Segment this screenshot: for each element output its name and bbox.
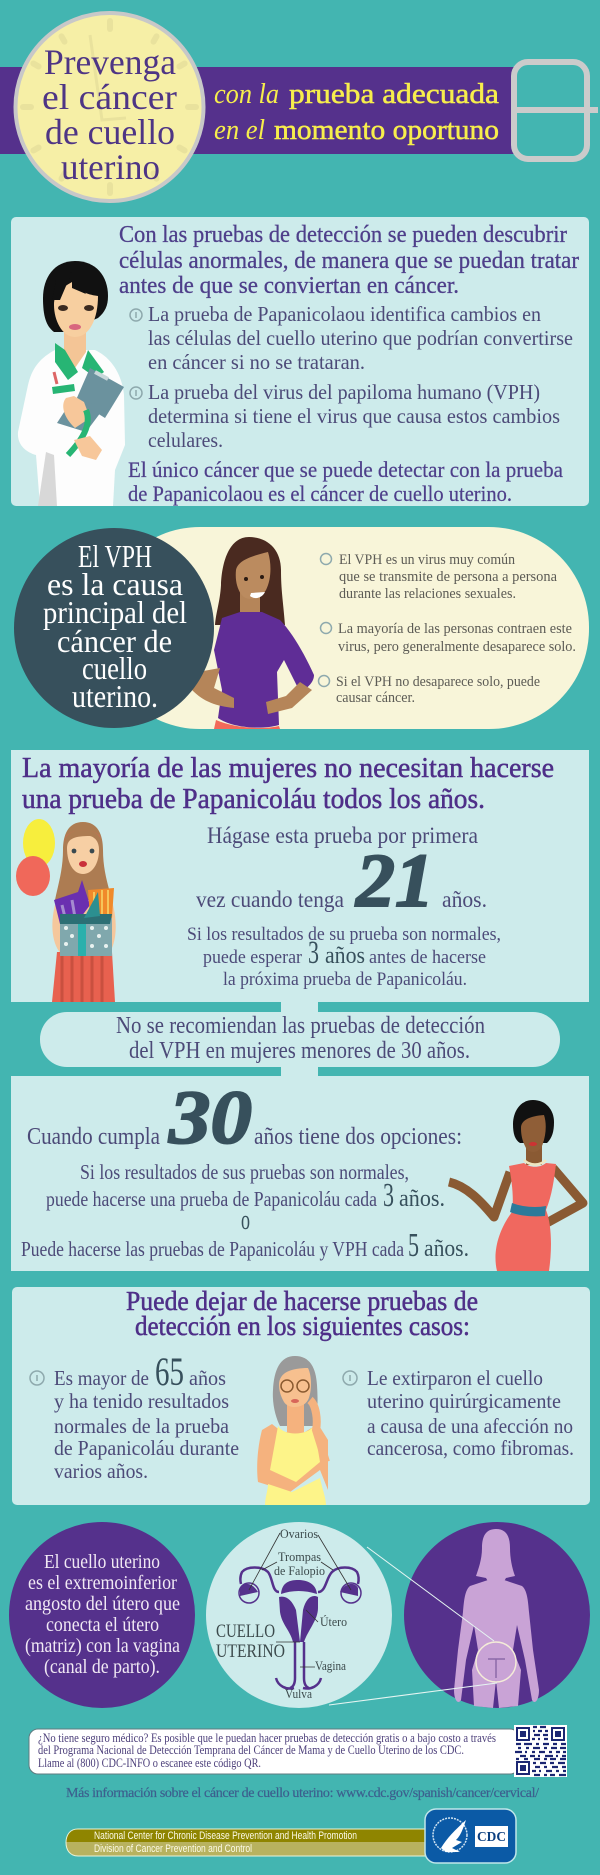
bullet: VPH: celulares. — [148, 428, 223, 452]
intro text: antes de que se conviertan en cáncer. — [119, 273, 459, 299]
diagram labels: Ovarios — [280, 1526, 318, 1541]
diagram labels: Vagina — [315, 1658, 346, 1673]
dark circle headline: El VPH — [78, 538, 152, 574]
subtitle: con la — [214, 78, 279, 110]
heading: La mayoría de las mujeres no necesitan hacerse — [22, 752, 554, 784]
dark circle headline: principal del — [43, 594, 187, 630]
fact: common virus: que se transmite de persona a persona — [339, 569, 557, 585]
diagram labels: Útero — [320, 1614, 347, 1629]
callout: sin seguro médico: ¿No tiene seguro médico? Es posible que le puedan hacer pruebas de detección gratis o a bajo costo a través — [38, 1731, 496, 1745]
intro text: Con las pruebas de detección se pueden descubrir — [119, 222, 567, 248]
illustration: girl with gifts — [16, 819, 116, 1002]
subtitle: prueba adecuada — [289, 78, 499, 110]
case: extirparon cuello uterino: a causa de una afección no — [367, 1414, 573, 1438]
bullet: VPH — [130, 380, 560, 452]
subtitle: momento oportuno — [274, 114, 499, 146]
heading: una prueba de Papanicoláu todos los años. — [22, 783, 485, 815]
case: extirparon cuello uterino: cancerosa, como fibromas. — [367, 1436, 574, 1460]
fact: can cause cancer: Si el VPH no desaparece solo, puede — [336, 674, 540, 690]
diagram labels: Vulva — [285, 1686, 312, 1701]
diagram labels: CUELLO — [216, 1621, 275, 1642]
heading: Puede dejar de hacerse pruebas de — [126, 1286, 478, 1316]
closing text: El único cáncer que se puede detectar con la prueba — [128, 457, 563, 482]
fact: most people: La mayoría de las personas contraen este — [338, 621, 572, 637]
option one: Si los resultados de sus pruebas son normales, — [80, 1160, 409, 1184]
dark circle headline: cuello — [82, 650, 147, 686]
case: mayor de 65: 65 — [155, 1349, 184, 1394]
three year text: antes de hacerse — [369, 947, 486, 968]
fact: common virus — [320, 552, 557, 602]
zoom lines — [329, 1547, 497, 1705]
bullet: Papanicolaou — [130, 302, 573, 374]
icon: QR code — [514, 1725, 567, 1777]
diagram labels — [216, 1526, 347, 1701]
option two — [21, 1227, 469, 1264]
footer: CDC division bar — [66, 1829, 428, 1856]
fact: most people: virus, pero generalmente desaparece solo. — [338, 639, 576, 655]
number: 30: 30 — [168, 1076, 252, 1160]
header: watch banner — [0, 13, 598, 201]
leader lines — [249, 1533, 351, 1667]
case: mayor de 65: Es mayor de — [54, 1366, 149, 1390]
three year text: años — [325, 943, 365, 969]
diagram labels: UTERINO — [216, 1641, 285, 1662]
first test text — [196, 823, 487, 912]
dark circle headline — [14, 528, 214, 728]
clock face — [16, 13, 204, 201]
first test text: años. — [442, 887, 487, 912]
title: el cáncer — [42, 77, 177, 117]
dark circle headline: es la causa — [47, 566, 183, 602]
heading: detección en los siguientes casos: — [135, 1311, 470, 1341]
two options text — [27, 1124, 462, 1150]
two options text: Cuando cumpla — [27, 1124, 160, 1150]
option two: años. — [424, 1236, 469, 1262]
three year text — [187, 924, 501, 990]
case: mayor de 65: varios años. — [54, 1459, 148, 1483]
panel: el VPH — [14, 527, 589, 729]
fact: common virus: El VPH es un virus muy común — [339, 552, 515, 568]
purple banner strap — [0, 67, 515, 154]
callout: VPH menores de 30 — [40, 1000, 560, 1078]
option one: 3 — [383, 1177, 394, 1214]
callout: sin seguro médico — [29, 1729, 519, 1774]
case: mayor de 65: y ha tenido resultados — [54, 1389, 229, 1413]
illustration: doctor — [18, 261, 125, 506]
heading — [126, 1286, 478, 1341]
option two: Puede hacerse las pruebas de Papanicoláu y VPH cada — [21, 1237, 405, 1261]
diagram labels: Trompas — [278, 1549, 321, 1564]
illustration: woman in coral dress — [449, 1100, 583, 1271]
callout: VPH menores de 30: del VPH en mujeres menores de 30 años. — [129, 1038, 470, 1064]
title: Prevenga — [44, 42, 176, 82]
definition circle: (canal de parto). — [44, 1656, 160, 1678]
logo: HHS and CDC: CDC — [477, 1830, 506, 1845]
footer: CDC division bar: National Center for Chronic Disease Prevention and Health Promotion — [94, 1830, 357, 1842]
number: 21: 21 — [355, 839, 434, 923]
illustration: older woman — [257, 1356, 328, 1505]
fact: most people — [320, 621, 576, 655]
bullet: Papanicolaou: en cáncer si no se trataran. — [148, 350, 365, 374]
closing text — [128, 457, 563, 506]
dark circle headline: uterino. — [72, 678, 158, 714]
three year text: puede esperar — [203, 947, 303, 968]
bullet: VPH: La prueba del virus del papiloma humano (VPH) — [148, 380, 540, 404]
subtitle — [214, 78, 499, 146]
watch buckle — [514, 62, 598, 159]
diagram labels: de Falopio — [274, 1563, 325, 1578]
case: extirparon cuello uterino: uterino quirúrgicamente — [367, 1389, 561, 1413]
case: mayor de 65 — [30, 1349, 239, 1483]
callout: sin seguro médico: del Programa Nacional de Detección Temprana del Cáncer de Mama y de Cuello Uterino de los CDC. — [38, 1743, 464, 1757]
option one — [46, 1160, 445, 1214]
title: de cuello — [45, 112, 175, 152]
callout: sin seguro médico: Llame al (800) CDC-INFO o escanee este código QR. — [38, 1756, 261, 1770]
definition circle — [9, 1522, 195, 1708]
logo: HHS and CDC — [425, 1809, 516, 1863]
heading — [22, 752, 554, 815]
three year text: 3 — [308, 935, 319, 971]
three year text: Si los resultados de su prueba son normales, — [187, 924, 501, 945]
panel: mayoría de las mujeres — [11, 750, 589, 1002]
section: anatomía — [9, 1522, 590, 1708]
bullet: VPH: determina si tiene el virus que causa estos cambios — [148, 404, 560, 428]
more information link: Más información sobre el cáncer de cuello uterino: www.cdc.gov/spanish/cancer/cervical/ — [66, 1786, 539, 1801]
definition circle: conecta el útero — [46, 1614, 159, 1636]
two options text: años tiene dos opciones: — [254, 1124, 462, 1150]
subtitle: en el — [214, 114, 265, 146]
case: extirparon cuello uterino — [343, 1366, 574, 1460]
panel: cuando cumpla 30 — [11, 1076, 589, 1271]
bullet: Papanicolaou: las células del cuello uterino que podrían convertirse — [148, 326, 573, 350]
bullet: Papanicolaou: La prueba de Papanicolaou identifica cambios en — [148, 302, 541, 326]
panel: pruebas de detección — [11, 217, 589, 506]
three year text: la próxima prueba de Papanicoláu. — [223, 969, 467, 990]
fact: common virus: durante las relaciones sexuales. — [339, 586, 516, 602]
or: o — [241, 1205, 250, 1236]
definition circle: El cuello uterino — [44, 1551, 160, 1573]
closing text: de Papanicolaou es el cáncer de cuello uterino. — [128, 481, 512, 506]
fact: can cause cancer — [318, 674, 540, 706]
case: mayor de 65: normales de la prueba — [54, 1414, 230, 1438]
body silhouette circle — [404, 1522, 590, 1708]
first test text: vez cuando tenga — [196, 887, 344, 912]
definition circle: es el extremoinferior — [28, 1572, 177, 1594]
case: mayor de 65: años — [189, 1366, 226, 1390]
panel: dejar de hacerse pruebas — [12, 1286, 590, 1505]
illustration: woman in purple sweater — [192, 537, 314, 729]
option one: años. — [399, 1186, 445, 1212]
first test text: Hágase esta prueba por primera — [207, 823, 478, 848]
case: extirparon cuello uterino: Le extirparon el cuello — [367, 1366, 543, 1390]
diagram circle: uterus — [206, 1522, 392, 1708]
intro text — [119, 222, 579, 299]
definition circle: (matriz) con la vagina — [25, 1635, 180, 1657]
title: uterino — [61, 147, 160, 187]
footer: CDC division bar: Division of Cancer Prevention and Control — [94, 1843, 252, 1855]
dark circle headline: cáncer de — [57, 623, 172, 659]
callout: VPH menores de 30: No se recomiendan las pruebas de detección — [116, 1013, 485, 1039]
option two: 5 — [408, 1227, 419, 1264]
intro text: células anormales, de manera que se puedan tratar — [119, 248, 579, 274]
fact: can cause cancer: causar cáncer. — [336, 690, 415, 706]
definition circle: angosto del útero que — [25, 1593, 180, 1615]
option one: puede hacerse una prueba de Papanicoláu cada — [46, 1187, 378, 1211]
uterus drawing — [239, 1568, 361, 1689]
case: mayor de 65: de Papanicoláu durante — [54, 1436, 239, 1460]
title — [42, 42, 177, 187]
